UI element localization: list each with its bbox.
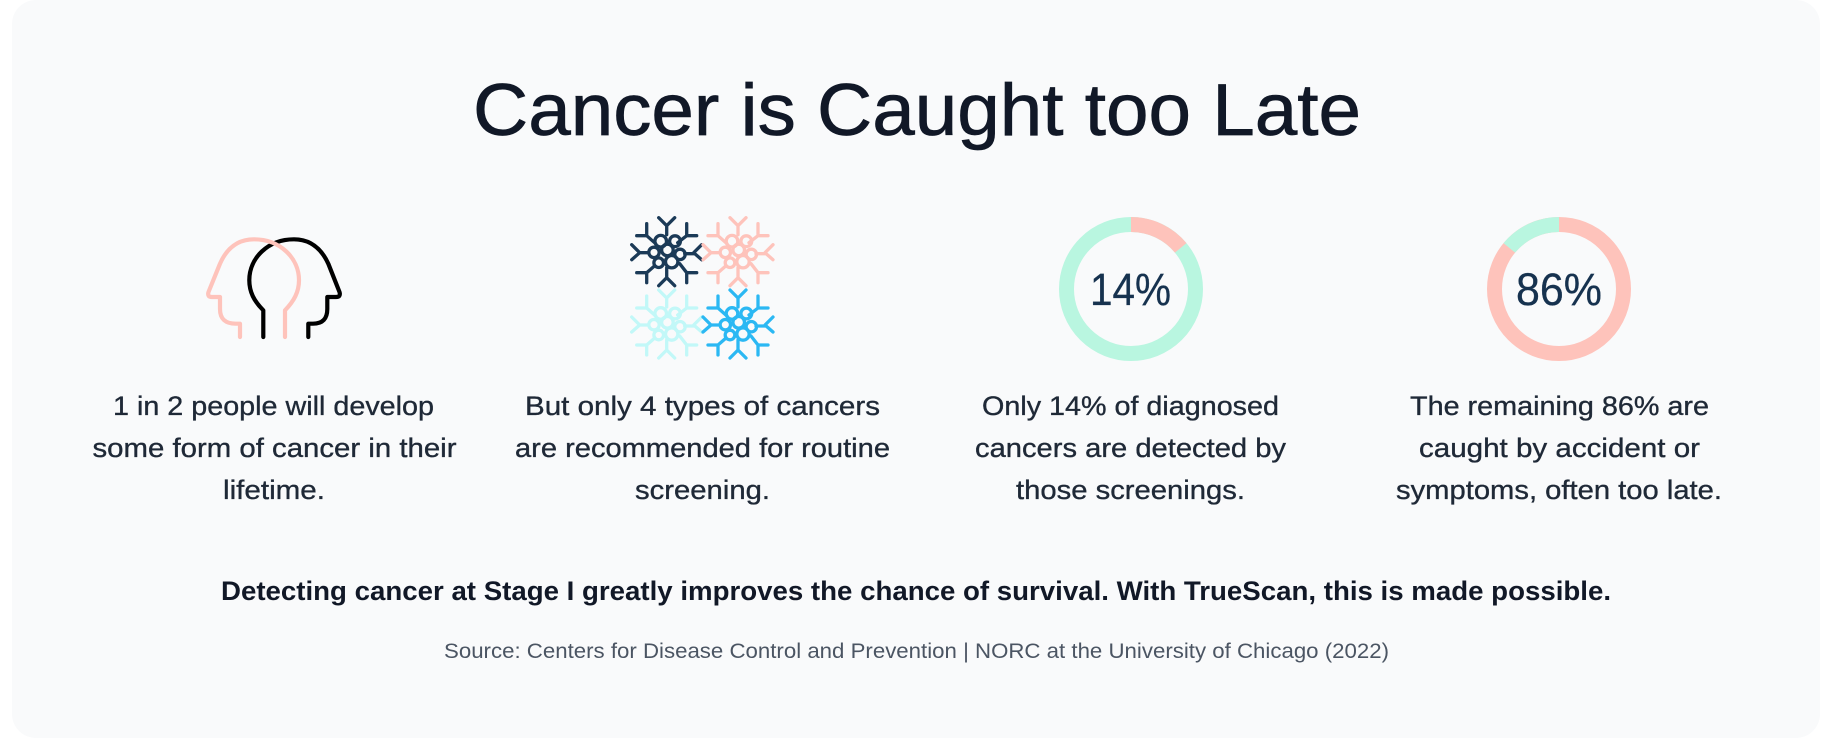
text: lifetime risk: lifetime.: [223, 475, 325, 505]
text: 86 percent caught late: [1396, 391, 1722, 505]
icon: two overlapping heads: [208, 239, 340, 337]
text: 14 percent detected: [975, 391, 1287, 505]
text: lifetime risk: some form of cancer in their: [92, 433, 456, 463]
text: screening types: [515, 391, 890, 505]
text: lifetime risk: 1 in 2 people will develop: [113, 391, 434, 421]
text: 86 percent caught late: caught by accident or: [1419, 433, 1700, 463]
chart: 14% donut: 14%: [1090, 264, 1171, 315]
title: Cancer is Caught too Late: [473, 70, 1361, 151]
panel: 14 percent column: [975, 224, 1287, 505]
text: 14 percent detected: Only 14% of diagnosed: [982, 391, 1279, 421]
callout: Stage I detection statement: Detecting cancer at Stage I greatly improves the chance of survival. With TrueScan, this is made possible.: [221, 576, 1611, 606]
chart: 86% donut: 86%: [1516, 264, 1602, 315]
text: 14 percent detected: those screenings.: [1016, 475, 1245, 505]
text: 86 percent caught late: The remaining 86% are: [1410, 391, 1709, 421]
panel: 86 percent column: [1396, 198, 1722, 505]
text: lifetime risk: [92, 391, 456, 505]
panel: screening types column: [515, 218, 890, 505]
text: 14 percent detected: cancers are detected by: [975, 433, 1287, 463]
icon: four cancer cell snowflakes: [632, 218, 773, 358]
text: screening types: screening.: [635, 475, 770, 505]
panel: lifetime risk column: [92, 239, 456, 505]
text: 86 percent caught late: symptoms, often too late.: [1396, 475, 1722, 505]
chart: 86% donut: [1468, 198, 1650, 380]
text: screening types: are recommended for routine: [515, 433, 890, 463]
chart: 14% donut: [1066, 224, 1196, 354]
text: screening types: But only 4 types of cancers: [525, 391, 880, 421]
source note: Source: Centers for Disease Control and Prevention | NORC at the University of Chicago (2022): [444, 640, 1389, 663]
